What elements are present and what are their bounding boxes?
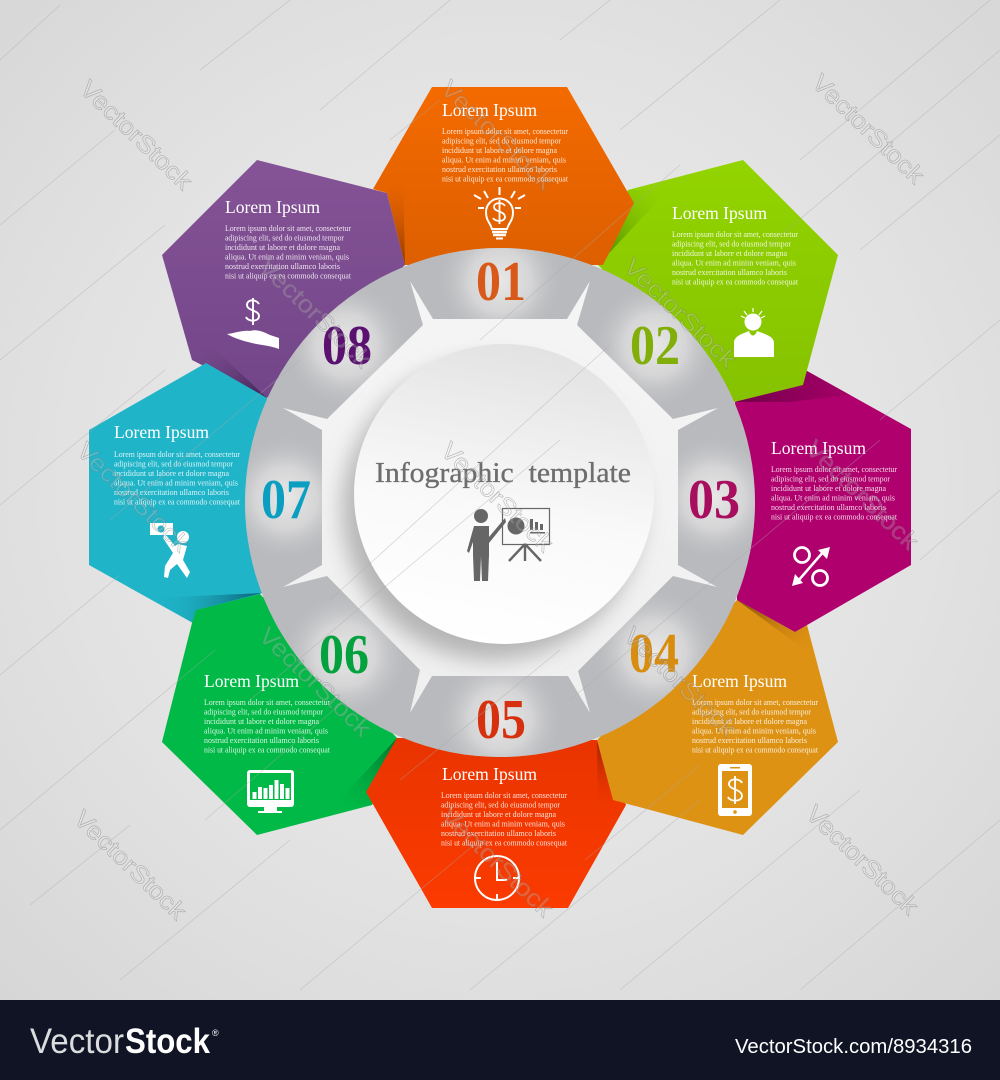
body text 06: adipiscing elit, sed do eiusmod tempor [204, 708, 323, 716]
watermarks [68, 69, 930, 926]
body text 05: incididunt ut labore et dolore magna [441, 810, 556, 819]
footer url: VectorStock.com/8934316 [735, 1036, 972, 1058]
footer logo [30, 1022, 219, 1061]
number 05: 05 [476, 689, 526, 751]
number 06: 06 [319, 624, 369, 686]
icon: hand holding dollar [227, 298, 279, 349]
number 02: 02 [630, 315, 680, 377]
central wheel [245, 248, 755, 757]
body text 06: aliqua. Ut enim ad minim veniam, quis [204, 726, 328, 735]
watermarks: VectorStock [800, 800, 924, 921]
watermarks: VectorStock [800, 435, 924, 556]
number 03: 03 [688, 469, 740, 531]
body text 03: nostrud exercitation ullamco laboris [771, 503, 886, 512]
body text 04: Lorem ipsum dolor sit amet, consectetur [692, 698, 818, 707]
body text 08: Lorem ipsum dolor sit amet, consectetur [225, 224, 351, 233]
panel 06: green [162, 594, 397, 835]
disk shadow [342, 360, 642, 660]
body text 04: aliqua. Ut enim ad minim veniam, quis [692, 726, 816, 735]
watermarks: VectorStock [253, 253, 377, 374]
watermarks: VectorStock [253, 622, 377, 743]
body text 02: Lorem ipsum dolor sit amet, consectetur [672, 230, 798, 239]
body text 01: incididunt ut labore et dolore magna [442, 146, 557, 155]
icon: clock [475, 856, 519, 900]
heading 03: Lorem Ipsum [771, 438, 866, 458]
number 08: 08 [322, 315, 372, 377]
body text 03: aliqua. Ut enim ad minim veniam, quis [771, 493, 895, 502]
footer bar [0, 1000, 1000, 1080]
body text 01: adipiscing elit, sed do eiusmod tempor [442, 136, 561, 146]
watermarks: VectorStock [435, 437, 559, 558]
body text 05: adipiscing elit, sed do eiusmod tempor [441, 800, 560, 810]
body text 04: incididunt ut labore et dolore magna [692, 717, 807, 726]
body text 03: nisi ut aliquip ex ea commodo consequat [771, 512, 898, 521]
number 01: 01 [476, 251, 526, 313]
body text 02: adipiscing elit, sed do eiusmod tempor [672, 240, 791, 248]
body text 08 [225, 224, 352, 280]
body text 02 [672, 230, 799, 286]
body text 06: nisi ut aliquip ex ea commodo consequat [204, 745, 331, 754]
heading 04: Lorem Ipsum [692, 671, 787, 691]
body text 02: aliqua. Ut enim ad minim veniam, quis [672, 258, 796, 267]
body text 03: incididunt ut labore et dolore magna [771, 484, 886, 493]
heading 08: Lorem Ipsum [225, 197, 320, 217]
body text 01 [442, 127, 569, 183]
heading 06: Lorem Ipsum [204, 671, 299, 691]
body text 01: nisi ut aliquip ex ea commodo consequat [442, 174, 569, 183]
body text 03: adipiscing elit, sed do eiusmod tempor [771, 474, 890, 484]
panel 02: green [598, 160, 838, 402]
panel 03: magenta [735, 371, 911, 632]
panel 08: purple [162, 160, 405, 398]
body text 01: nostrud exercitation ullamco laboris [442, 165, 557, 174]
icon: monitor with bars [247, 770, 294, 813]
body text 04 [692, 698, 819, 754]
icon: smartphone with dollar [718, 764, 752, 816]
body text 07 [114, 450, 241, 506]
heading 01: Lorem Ipsum [442, 100, 537, 120]
body text 04: nisi ut aliquip ex ea commodo consequat [692, 745, 819, 754]
ring cell highlights [245, 248, 755, 757]
footer logo: Stock [125, 1022, 210, 1061]
footer logo: ® [212, 1028, 219, 1038]
body text 03 [771, 465, 898, 521]
panel 01: orange [373, 87, 634, 265]
body text 01: Lorem ipsum dolor sit amet, consectetur [442, 127, 568, 136]
title: Infographic template [375, 457, 631, 489]
centre disk [354, 344, 654, 644]
body text 02: nostrud exercitation ullamco laboris [672, 268, 787, 277]
number 07: 07 [261, 469, 311, 531]
watermarks: VectorStock [435, 75, 559, 196]
body text 05: nisi ut aliquip ex ea commodo consequat [441, 838, 568, 847]
watermarks: VectorStock [74, 75, 198, 196]
footer logo: Vector [30, 1022, 124, 1061]
body text 02: incididunt ut labore et dolore magna [672, 249, 787, 258]
body text 07: nostrud exercitation ullamco laboris [114, 488, 229, 497]
body text 06 [204, 698, 331, 754]
body text 07: Lorem ipsum dolor sit amet, consectetur [114, 450, 240, 459]
body text 07: aliqua. Ut enim ad minim veniam, quis [114, 478, 238, 487]
body text 08: aliqua. Ut enim ad minim veniam, quis [225, 252, 349, 261]
body text 08: nostrud exercitation ullamco laboris [225, 262, 340, 271]
body text 05: aliqua. Ut enim ad minim veniam, quis [441, 819, 565, 828]
icon: percent arrows [792, 547, 830, 586]
watermarks: VectorStock [68, 805, 192, 926]
icon: presenter at chart board [467, 508, 550, 581]
icon: light bulb with dollar [474, 187, 525, 238]
white star plate [283, 281, 718, 713]
watermarks: VectorStock [435, 802, 559, 923]
body text 01: aliqua. Ut enim ad minim veniam, quis [442, 155, 566, 164]
heading 07: Lorem Ipsum [114, 422, 209, 442]
body text 07: adipiscing elit, sed do eiusmod tempor [114, 460, 233, 468]
number 04: 04 [629, 623, 679, 685]
heading 02: Lorem Ipsum [672, 203, 767, 223]
body text 06: Lorem ipsum dolor sit amet, consectetur [204, 698, 330, 707]
body text 07: nisi ut aliquip ex ea commodo consequat [114, 497, 241, 506]
body text 08: nisi ut aliquip ex ea commodo consequat [225, 271, 352, 280]
body text 02: nisi ut aliquip ex ea commodo consequat [672, 277, 799, 286]
watermarks: VectorStock [71, 437, 195, 558]
body text 05 [441, 791, 568, 847]
body text 08: adipiscing elit, sed do eiusmod tempor [225, 234, 344, 242]
body text 04: adipiscing elit, sed do eiusmod tempor [692, 708, 811, 716]
body text 03: Lorem ipsum dolor sit amet, consectetur [771, 465, 897, 474]
body text 06: incididunt ut labore et dolore magna [204, 717, 319, 726]
icon: person carrying money [150, 523, 190, 578]
grey ring [245, 248, 755, 757]
body text 08: incididunt ut labore et dolore magna [225, 243, 340, 252]
icon: person with bulb head [734, 308, 774, 357]
body text 07: incididunt ut labore et dolore magna [114, 469, 229, 478]
panel 05: red [366, 738, 626, 908]
heading 05: Lorem Ipsum [442, 764, 537, 784]
watermarks: VectorStock [806, 69, 930, 190]
panel 04: amber [597, 600, 838, 835]
body text 04: nostrud exercitation ullamco laboris [692, 736, 807, 745]
body text 05: Lorem ipsum dolor sit amet, consectetur [441, 791, 567, 800]
body text 05: nostrud exercitation ullamco laboris [441, 829, 556, 838]
watermarks: VectorStock [618, 622, 742, 743]
watermarks: VectorStock [618, 253, 742, 374]
panel 07: cyan [89, 363, 267, 623]
body text 06: nostrud exercitation ullamco laboris [204, 736, 319, 745]
